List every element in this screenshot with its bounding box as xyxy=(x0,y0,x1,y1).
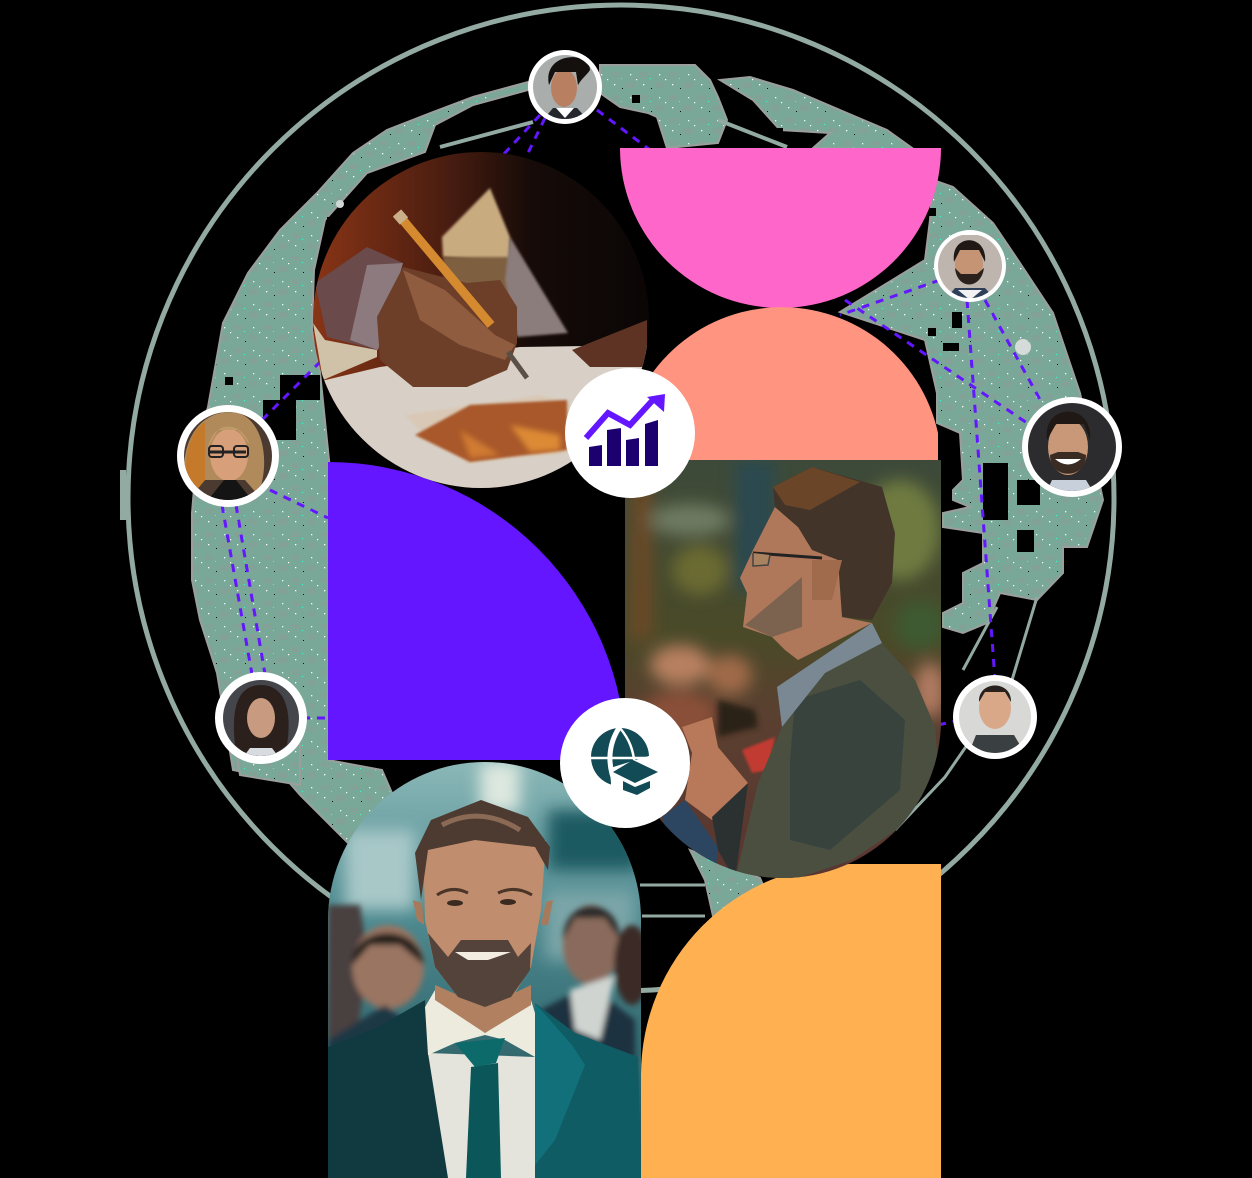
salmon dome xyxy=(622,307,938,460)
avatar: woman with glasses xyxy=(177,405,279,507)
photo: smiling businessman xyxy=(328,760,650,1178)
photo: hand writing on report xyxy=(310,150,650,490)
icon badge: globe and graduation cap xyxy=(560,698,690,828)
icon badge: growth chart xyxy=(565,368,695,498)
avatar: bearded man xyxy=(934,230,1006,302)
avatar: man in patterned shirt xyxy=(953,675,1037,759)
photo: presenter speaking to audience xyxy=(625,460,946,880)
avatar: smiling man xyxy=(1022,397,1122,497)
pink half circle xyxy=(620,148,941,308)
orbit rings xyxy=(123,5,1114,991)
infographic canvas xyxy=(120,2,1122,1178)
orange quarter shape xyxy=(641,864,941,1178)
purple quarter circle xyxy=(328,462,626,760)
dashed network connections xyxy=(222,110,1043,725)
avatar: dark-haired woman xyxy=(215,672,307,764)
world map ring xyxy=(192,65,1103,925)
map holes and city dots xyxy=(225,95,1040,552)
avatar: man top xyxy=(528,50,602,124)
